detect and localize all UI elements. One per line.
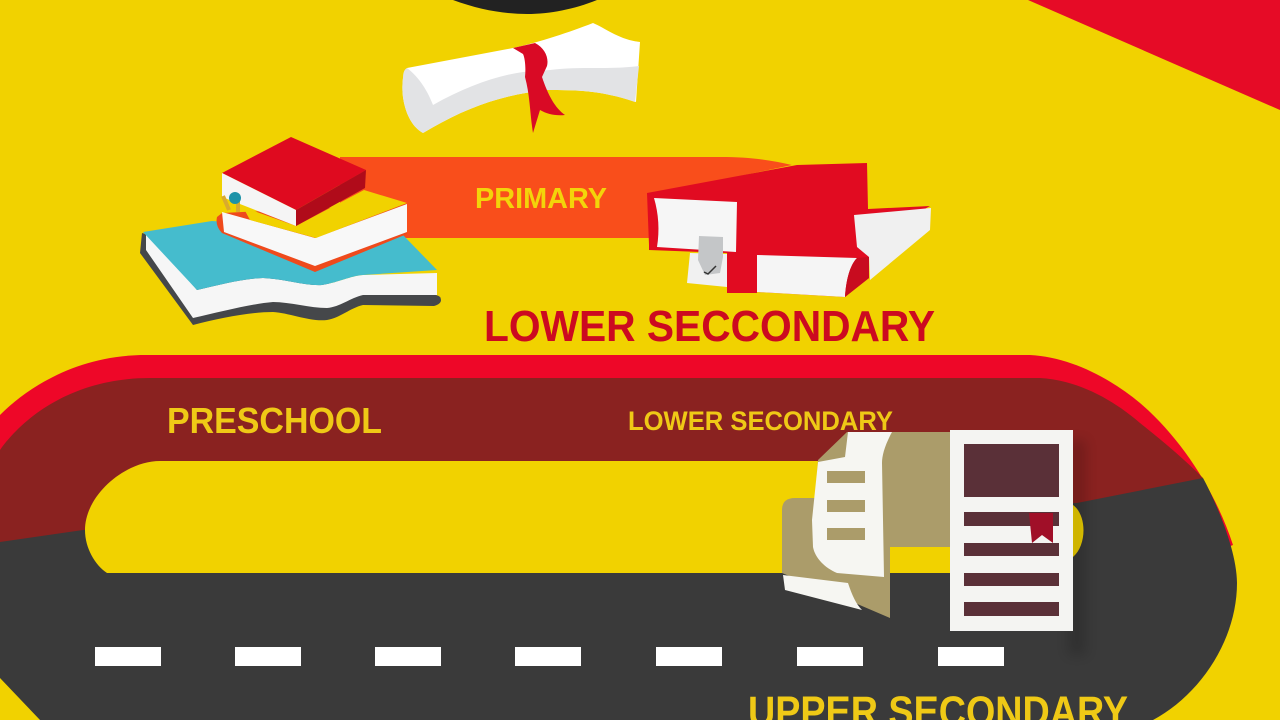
text: PRIMARY: PRIMARY [475, 183, 607, 215]
red outer band [0, 355, 1233, 600]
dark grey road [0, 478, 1237, 720]
icon: scroll ribbon [513, 43, 565, 133]
teal book [140, 233, 441, 325]
orange book [217, 204, 407, 272]
ribbon bookmark [1029, 513, 1053, 543]
dark red band [0, 378, 1203, 560]
icon: right red books [647, 163, 931, 297]
road track [0, 355, 1237, 720]
soft shadow [1068, 440, 1086, 655]
yellow inner hole [85, 461, 1084, 573]
banner: primary [340, 157, 792, 238]
tan back sheets [782, 432, 950, 618]
icon: diploma scroll [402, 23, 640, 133]
top right red corner [1028, 0, 1280, 110]
report image block [964, 444, 1059, 497]
white curled sheet [812, 432, 892, 577]
tan lines [827, 471, 865, 540]
black cap edge at top [453, 0, 597, 14]
text: LOWER SECONDARY: LOWER SECONDARY [628, 406, 893, 436]
red book [222, 137, 366, 210]
icon: documents [782, 430, 1086, 655]
white report page [950, 430, 1073, 631]
bookmark tag [687, 253, 727, 287]
icon: left book stack [140, 137, 441, 325]
heading: LOWER SECCONDARY: LOWER SECCONDARY [484, 302, 935, 351]
report lines [964, 512, 1059, 616]
text: PRESCHOOL: PRESCHOOL [167, 400, 382, 441]
road dashes [95, 647, 1004, 666]
